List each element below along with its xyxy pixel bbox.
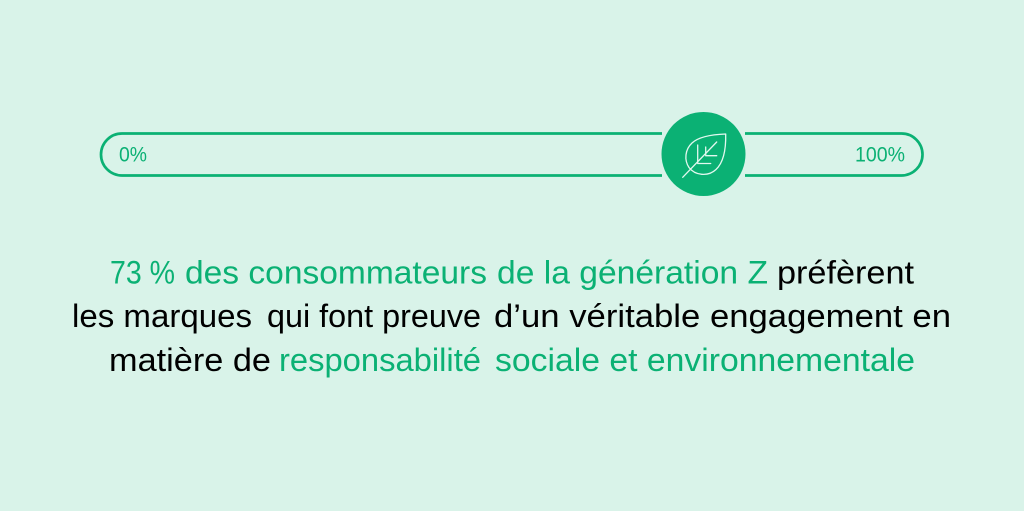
- gap around marker: [662, 128, 745, 182]
- line 1: [110, 254, 914, 290]
- label: 0%: 0%: [119, 144, 147, 166]
- line 1: 73 %: [110, 254, 175, 290]
- headline text: [72, 254, 951, 378]
- line 2: [72, 298, 951, 334]
- marker circle: [662, 112, 746, 196]
- line 1: des consommateurs: [185, 254, 487, 290]
- line 2: qui font preuve: [267, 298, 481, 334]
- line 3: matière de: [109, 342, 271, 378]
- line 3: sociale et environnementale: [495, 342, 915, 378]
- line 2: les marques: [72, 298, 252, 334]
- bar outline: [101, 134, 922, 176]
- label: 100%: 100%: [855, 144, 905, 166]
- line 2: d’un véritable engagement en: [494, 298, 951, 334]
- progress bar: [101, 112, 922, 196]
- line 3: responsabilité: [279, 342, 481, 378]
- line 1: de la génération Z: [497, 254, 768, 290]
- line 3: [109, 342, 915, 378]
- line 1: préfèrent: [777, 254, 914, 290]
- icon: leaf: [683, 134, 726, 177]
